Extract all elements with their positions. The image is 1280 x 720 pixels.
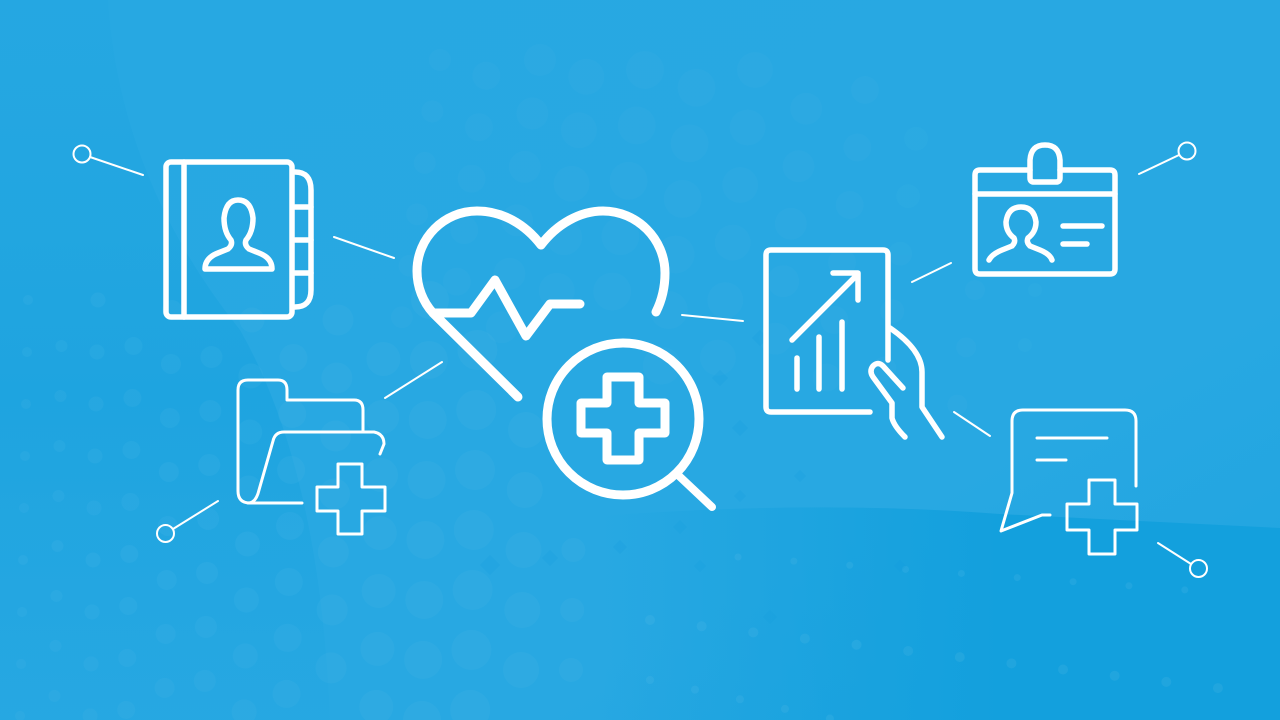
icon: folder with plus [238, 380, 385, 534]
connector lines and nodes [74, 142, 1207, 577]
icon: chat bubble with plus [1001, 410, 1137, 554]
icon: magnifier with medical cross [547, 343, 712, 507]
icon: heart with pulse [417, 211, 665, 397]
icon: tablet with growth chart and hand [766, 250, 942, 437]
icon: ID badge [975, 145, 1115, 274]
icon: address book [166, 162, 311, 317]
